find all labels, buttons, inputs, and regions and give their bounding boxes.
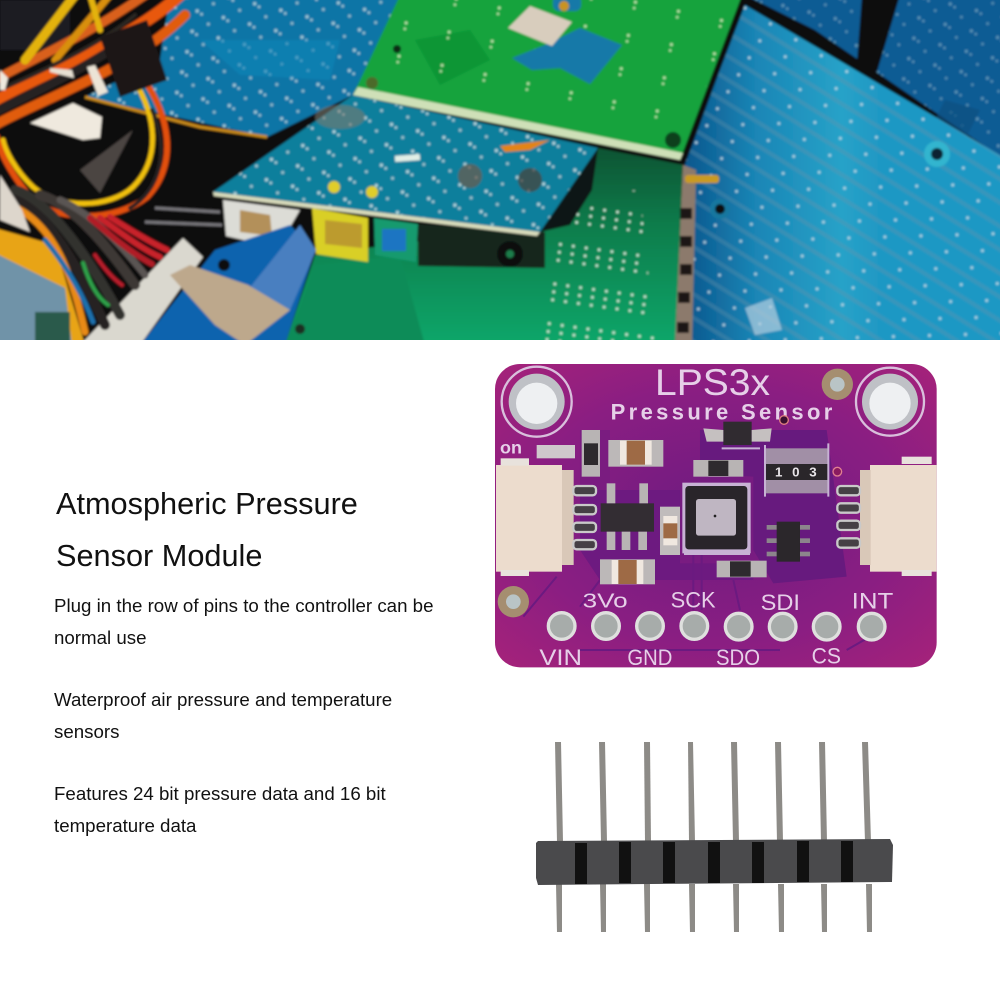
board silkscreen: GND	[627, 645, 672, 670]
mounting holes	[498, 367, 924, 617]
pin holes	[548, 613, 885, 640]
title: Sensor Module	[56, 538, 262, 573]
board silkscreen: SCK	[671, 587, 716, 612]
right light-blue board	[683, 5, 1000, 345]
feature text: data bits: temperature data	[54, 815, 196, 836]
board silkscreen: on	[500, 437, 522, 457]
dark component band under teal board	[418, 224, 545, 268]
components	[537, 422, 828, 584]
board silkscreen: INT	[852, 589, 893, 614]
feature text: plug in	[54, 595, 433, 648]
title: Atmospheric Pressure	[56, 486, 358, 521]
board silkscreen: LPS3x	[655, 362, 770, 403]
RJ45 and USB-B and jack connectors	[223, 200, 523, 267]
USB daughterboard	[508, 0, 622, 84]
board silkscreen: CS	[812, 643, 841, 668]
lower green board	[285, 148, 683, 345]
feature text: data bits	[54, 783, 386, 836]
top-right dark blue board	[745, 0, 1000, 160]
feature text: waterproof: Waterproof air pressure and temperature	[54, 689, 392, 710]
edge connector strip	[675, 165, 719, 345]
PCB body	[495, 364, 937, 667]
photo: pile of circuit boards and wires	[0, 0, 1000, 340]
board silkscreen	[500, 362, 893, 670]
feature text: waterproof	[54, 689, 392, 742]
feature text: waterproof: sensors	[54, 721, 120, 742]
pressure sensor chip	[682, 483, 751, 553]
board silkscreen: SDI	[761, 590, 800, 615]
board silkscreen: Pressure Sensor	[611, 399, 833, 424]
feature text: plug in: normal use	[54, 627, 147, 648]
orange/yellow panel bottom-left	[0, 220, 85, 345]
teal-blue middle board	[213, 95, 598, 236]
title	[56, 486, 358, 573]
board silkscreen: VIN	[539, 645, 582, 670]
board silkscreen: SDO	[716, 645, 760, 670]
bright green board	[353, 0, 742, 160]
wires	[0, 0, 185, 332]
cable ties and white plug	[0, 20, 222, 232]
8-pin header strip	[536, 742, 893, 932]
board silkscreen: 3Vo	[583, 589, 628, 612]
feature text: plug in: Plug in the row of pins to the controller can be	[54, 595, 433, 616]
lower-left blue board and white connector	[80, 225, 316, 345]
components: 103	[775, 465, 817, 480]
top-left blue board	[85, 0, 405, 137]
feature text: data bits: Features 24 bit pressure data and 16 bit	[54, 783, 386, 804]
JST connectors	[496, 457, 937, 576]
